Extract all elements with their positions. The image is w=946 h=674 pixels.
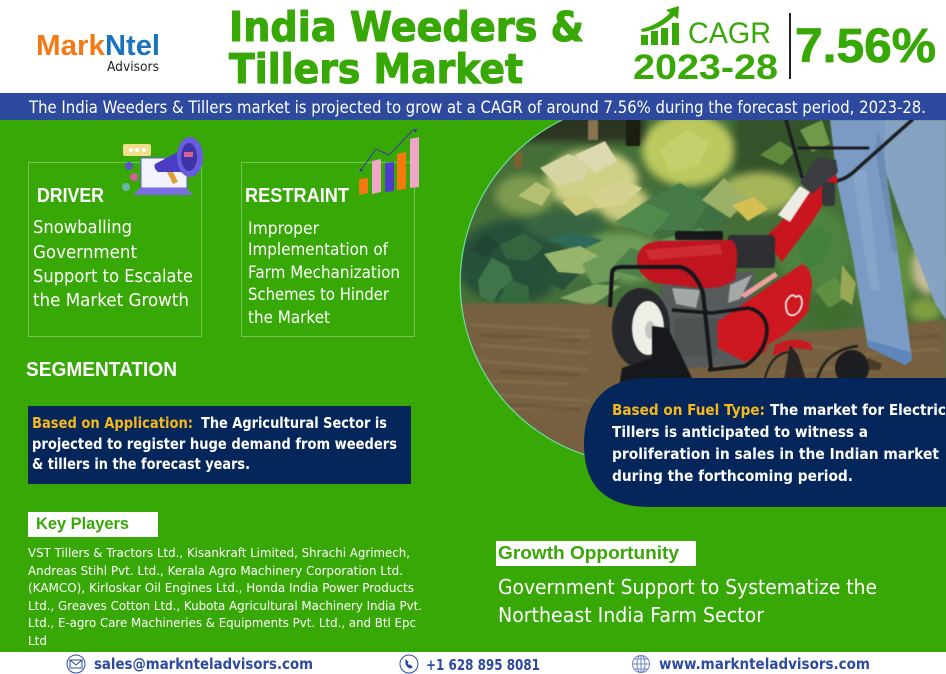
growth opportunity text <box>498 575 877 627</box>
segmentation heading: SEGMENTATION <box>26 359 177 381</box>
key players list: VST Tillers & Tractors Ltd., Kisankraft Limited, Shrachi Agrimech, <box>28 545 410 560</box>
air filter <box>728 235 775 268</box>
logo: MarkNtel Advisors: Advisors <box>107 60 159 75</box>
restraint text: Implementation of <box>248 240 389 259</box>
panel: application segment: The Agricultural Sector is <box>201 414 387 432</box>
title: India Weeders & <box>229 3 584 51</box>
summary banner <box>0 93 946 120</box>
title <box>229 3 584 93</box>
logo: MarkNtel Advisors <box>36 30 160 75</box>
panel: restraint <box>242 162 414 336</box>
foliage backdrop <box>461 120 946 322</box>
growth opportunity text: Northeast India Farm Sector <box>498 603 765 627</box>
driver text: the Market Growth <box>33 290 189 311</box>
key players list <box>28 545 422 648</box>
driver heading: DRIVER <box>37 185 104 207</box>
growth opportunity label: Growth Opportunity <box>498 542 680 563</box>
footer <box>0 652 946 674</box>
tines and rear wheel <box>765 352 795 378</box>
key players list: Ltd <box>28 633 47 648</box>
panel: application segment: Based on Application: <box>32 414 193 432</box>
leaves <box>470 120 856 314</box>
website: www.marknteladvisors.com <box>659 655 870 673</box>
restraint text: Farm Mechanization <box>248 263 400 282</box>
growth opportunity text: Government Support to Systematize the <box>498 575 877 599</box>
phone number: +1 628 895 8081 <box>426 656 540 674</box>
icon: bar chart with trend line <box>359 129 419 195</box>
red shield <box>717 264 812 362</box>
restraint text: Improper <box>248 219 319 238</box>
restraint text: the Market <box>248 308 330 327</box>
restraint text: Schemes to Hinder <box>248 285 389 304</box>
CAGR label: CAGR <box>688 17 771 50</box>
panel: driver <box>28 162 202 336</box>
mulch ground <box>462 302 946 454</box>
CAGR divider <box>789 13 791 79</box>
icon: globe <box>632 656 650 672</box>
key players list: Ltd., E-agro Care Machineries & Equipments Pvt. Ltd., and Btl Epc <box>28 615 416 630</box>
logo: MarkNtel Advisors: Mark <box>36 30 106 62</box>
panel: application segment: & tillers in the forecast years. <box>32 455 250 473</box>
CAGR period: 2023-28 <box>633 48 778 87</box>
icon: megaphone and laptop <box>122 137 203 195</box>
panel: application segment <box>28 406 411 484</box>
panel: application segment: projected to register huge demand from weeders <box>32 435 397 453</box>
key players label: Key Players <box>36 515 129 533</box>
logo: MarkNtel Advisors: Ntel <box>105 30 160 62</box>
CAGR value: 7.56% <box>795 20 936 73</box>
key players list: Andreas Stihl Pvt. Ltd., Kerala Agro Machinery Corporation Ltd. <box>28 563 403 578</box>
icon: email <box>67 655 85 673</box>
driver text: Support to Escalate <box>33 266 193 287</box>
panel: fuel type segment: during the forthcoming period. <box>612 467 853 485</box>
handlebars <box>786 120 912 181</box>
tiller frame <box>610 157 869 388</box>
key players list: (KAMCO), Kirloskar Oil Engines Ltd., Honda India Power Products <box>28 580 414 595</box>
email address: sales@marknteladvisors.com <box>94 655 313 673</box>
icon: phone <box>400 655 418 673</box>
restraint heading: RESTRAINT <box>245 185 349 207</box>
icon: CAGR growth bars and arrow <box>641 6 679 45</box>
driver text <box>33 217 193 311</box>
stand <box>619 326 692 388</box>
panel: fuel type segment: Based on Fuel Type: <box>612 401 765 419</box>
jeans <box>830 120 946 370</box>
driver text: Government <box>33 242 137 263</box>
guard frame <box>610 267 711 368</box>
title: Tillers Market <box>229 45 523 93</box>
panel: fuel type segment <box>584 378 946 507</box>
photo: tiller in garden <box>460 120 946 454</box>
key players list: Ltd., Greaves Cotton Ltd., Kubota Agricultural Machinery India Pvt. <box>28 598 422 613</box>
restraint text <box>248 219 400 327</box>
front wheel <box>612 288 670 368</box>
fuel tank <box>637 240 737 288</box>
photo outline <box>460 120 600 459</box>
panel: fuel type segment: Tillers is anticipated to witness a <box>612 423 868 441</box>
header band <box>0 0 946 93</box>
engine block <box>660 270 755 368</box>
key players label <box>28 512 158 537</box>
driver text: Snowballing <box>33 217 132 238</box>
